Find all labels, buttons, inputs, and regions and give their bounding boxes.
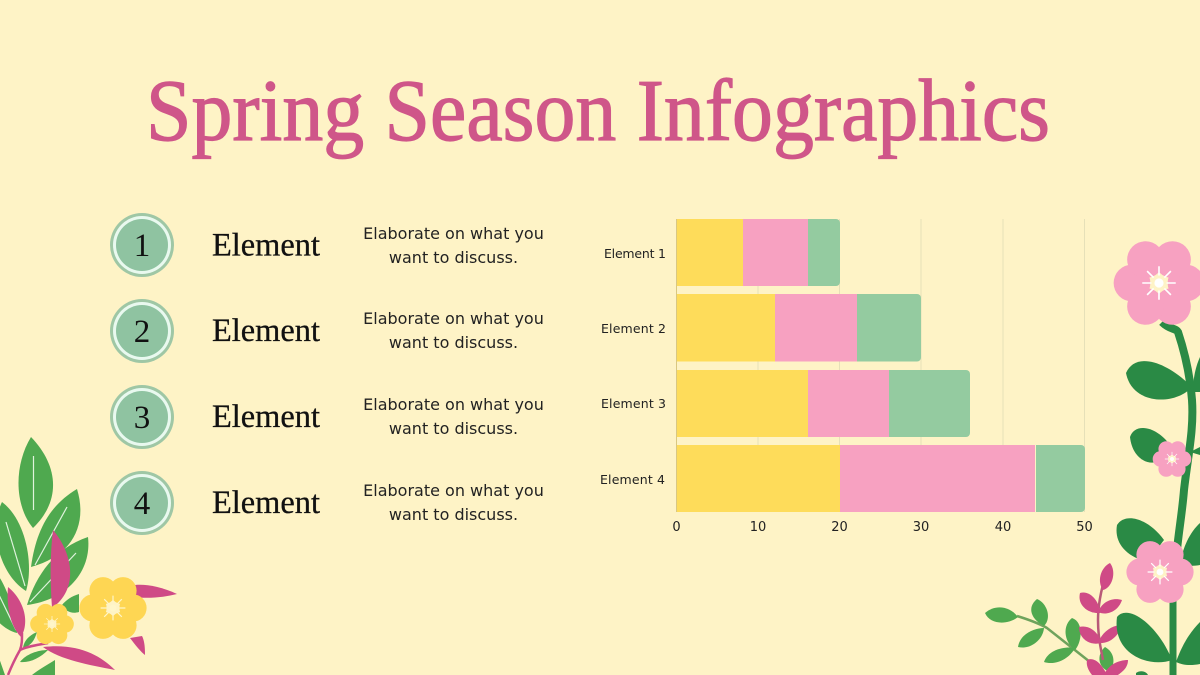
category labels: Element 2 — [601, 321, 666, 336]
category labels: Element 4 — [600, 472, 665, 487]
category labels: Element 3 — [601, 396, 666, 411]
list row 1 — [110, 213, 544, 277]
description 1: Elaborate on what you — [363, 224, 544, 243]
value axis labels: 50 — [1076, 520, 1093, 535]
description 4: Elaborate on what you — [363, 481, 544, 500]
icon: large yellow flower — [79, 577, 147, 639]
description 2: want to discuss. — [389, 333, 518, 352]
description 2: Elaborate on what you — [363, 309, 544, 328]
element label 2: Element — [212, 313, 320, 349]
description 3: want to discuss. — [389, 419, 518, 438]
icon: medium pink flower — [1126, 541, 1194, 603]
description 1: want to discuss. — [389, 248, 518, 267]
bar: Element 1 — [677, 219, 840, 286]
floral decoration: bottom left — [0, 437, 177, 675]
stacked bar chart — [600, 219, 1093, 535]
bar: Element 4 — [677, 445, 1085, 512]
title: Spring Season Infographics — [146, 63, 1050, 160]
icon: large pink flower — [1114, 241, 1200, 325]
icon: small yellow flower — [30, 604, 74, 644]
category labels: Element 1 — [604, 246, 666, 261]
number badge 3 — [110, 385, 174, 449]
description 4: want to discuss. — [389, 505, 518, 524]
number badge 2 — [110, 299, 174, 363]
number badge 1 — [110, 213, 174, 277]
description 3: Elaborate on what you — [363, 395, 544, 414]
floral decoration: right vine — [1114, 241, 1200, 675]
list row 3 — [110, 385, 544, 449]
number badge 4 — [110, 471, 174, 535]
value axis labels: 10 — [750, 520, 766, 535]
element label 3: Element — [212, 399, 320, 435]
list row 4 — [110, 471, 544, 535]
bar: Element 3 — [677, 370, 970, 437]
number badge 1: 1 — [134, 228, 150, 264]
value axis labels — [672, 520, 1093, 535]
bar: Element 2 — [677, 294, 921, 362]
number badge 2: 2 — [134, 314, 150, 350]
element label 1: Element — [212, 228, 320, 264]
value axis labels: 20 — [831, 520, 848, 535]
element label 4: Element — [212, 485, 320, 521]
value axis labels: 0 — [672, 520, 681, 535]
number badge 3: 3 — [134, 400, 150, 436]
value axis labels: 40 — [995, 520, 1011, 535]
icon: small pink flower — [1153, 441, 1191, 477]
value axis labels: 30 — [913, 520, 929, 535]
category labels — [600, 246, 666, 487]
list row 2 — [110, 299, 544, 363]
floral decoration: bottom right branches — [985, 563, 1128, 675]
number badge 4: 4 — [134, 486, 150, 522]
